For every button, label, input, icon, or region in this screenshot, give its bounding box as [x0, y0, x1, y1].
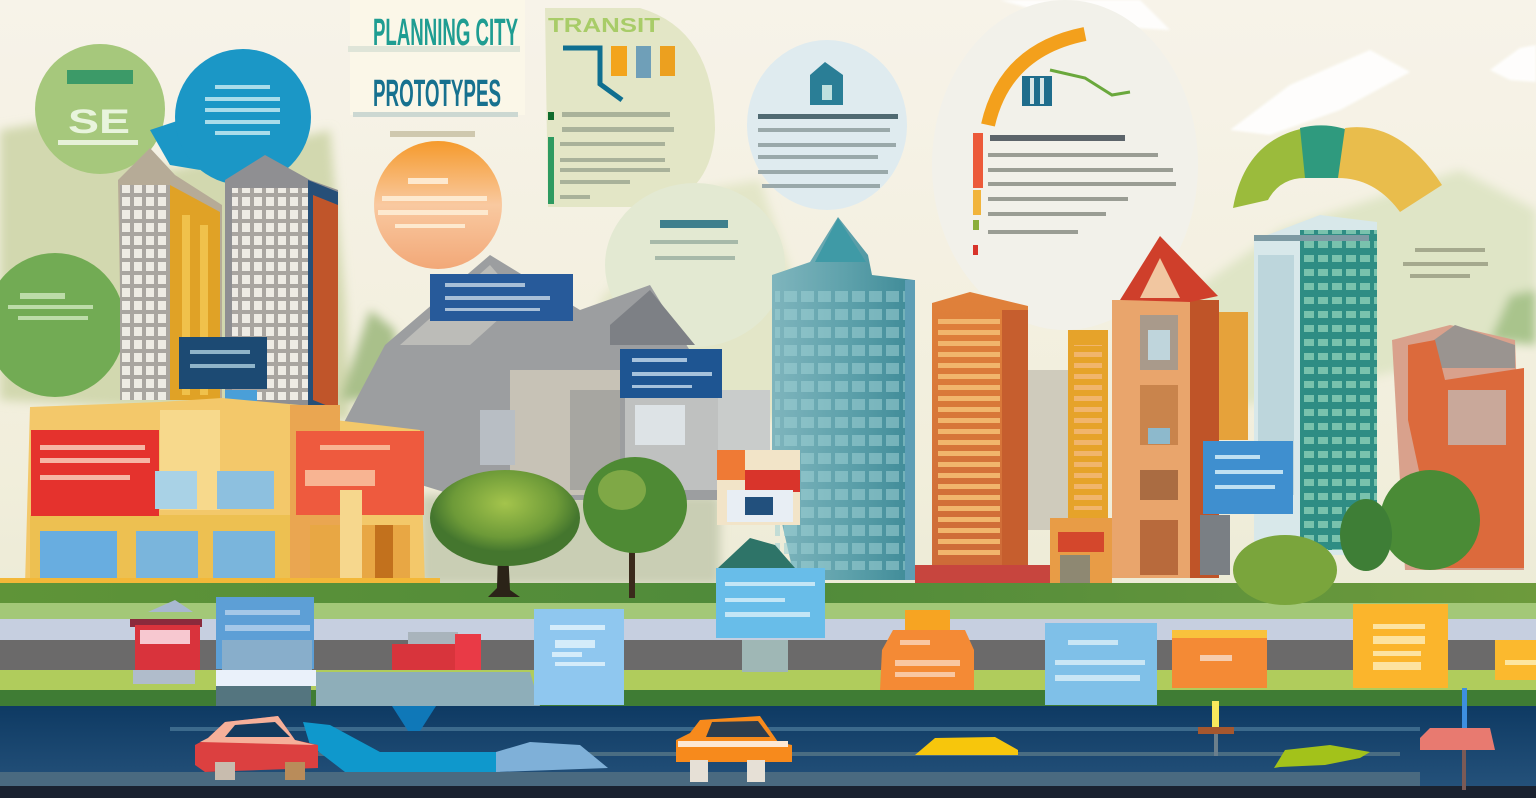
- small house peak: [718, 538, 795, 568]
- title block: [348, 0, 525, 117]
- blue label: left towers: [179, 337, 267, 422]
- blue billboard: [1203, 441, 1293, 514]
- car: yellow: [915, 737, 1018, 755]
- info card 1: [216, 597, 316, 706]
- orange sign 2: [1172, 630, 1267, 688]
- building: right red block: [1392, 325, 1524, 570]
- building: left twin towers: [118, 148, 338, 415]
- panel: orange circle callout: [374, 131, 502, 269]
- panel: chart callout green: TRANSIT: [548, 15, 660, 37]
- clouds: [1000, 0, 1536, 135]
- red truck: [392, 632, 481, 670]
- panel: blue info bubble: [747, 40, 907, 210]
- blue label: mountain: [430, 274, 573, 321]
- tall teal tower: [772, 217, 915, 580]
- info card 2: [534, 609, 624, 705]
- building: orange block: [915, 292, 1068, 587]
- panel: green-grey lower bubble: [605, 183, 785, 347]
- title block: PLANNING CITY: [373, 12, 518, 54]
- title block: PROTOTYPES: [373, 73, 501, 115]
- panel: top left green bubble: SE: [68, 103, 130, 141]
- red sign: [717, 450, 800, 525]
- signpost: blue with red sign: [1420, 688, 1495, 790]
- red kiosk: [130, 600, 202, 684]
- building: low yellow school: [0, 398, 440, 585]
- panel: top left green bubble: [35, 44, 165, 174]
- building: red roof house tower: [1050, 236, 1230, 586]
- ground: sidewalk and grey road: [0, 619, 1536, 706]
- panel: large white gauge bubble: [932, 0, 1198, 330]
- yellow card 1: [1353, 604, 1448, 688]
- ground: grass strip: [0, 583, 1536, 619]
- signpost: yellow: [1198, 701, 1234, 756]
- blue label: houses: [620, 349, 722, 398]
- building: teal right tower: [1254, 215, 1377, 555]
- panel: top left blue bubble: [150, 49, 311, 185]
- car: red: [195, 716, 318, 780]
- highway: [0, 706, 1536, 798]
- donut gauge chart: [1233, 125, 1442, 212]
- right text note: [1403, 248, 1488, 278]
- trees: [430, 457, 687, 598]
- right trees: [1233, 470, 1480, 605]
- background hills: [0, 120, 1536, 585]
- building: yellow back tower: [1068, 312, 1248, 520]
- car: orange: [676, 716, 792, 782]
- panel: left green bubble: [0, 253, 125, 397]
- info card 3: [716, 568, 825, 672]
- blue swoosh: [303, 706, 608, 772]
- car: lime: [1274, 745, 1370, 768]
- yellow card 2: [1495, 640, 1536, 680]
- water reflection under road: [316, 672, 540, 706]
- panel: chart callout green: [545, 8, 715, 207]
- background grey mountains and houses: [340, 255, 770, 500]
- info card 4: [1045, 623, 1157, 705]
- orange sign 1: [880, 610, 974, 690]
